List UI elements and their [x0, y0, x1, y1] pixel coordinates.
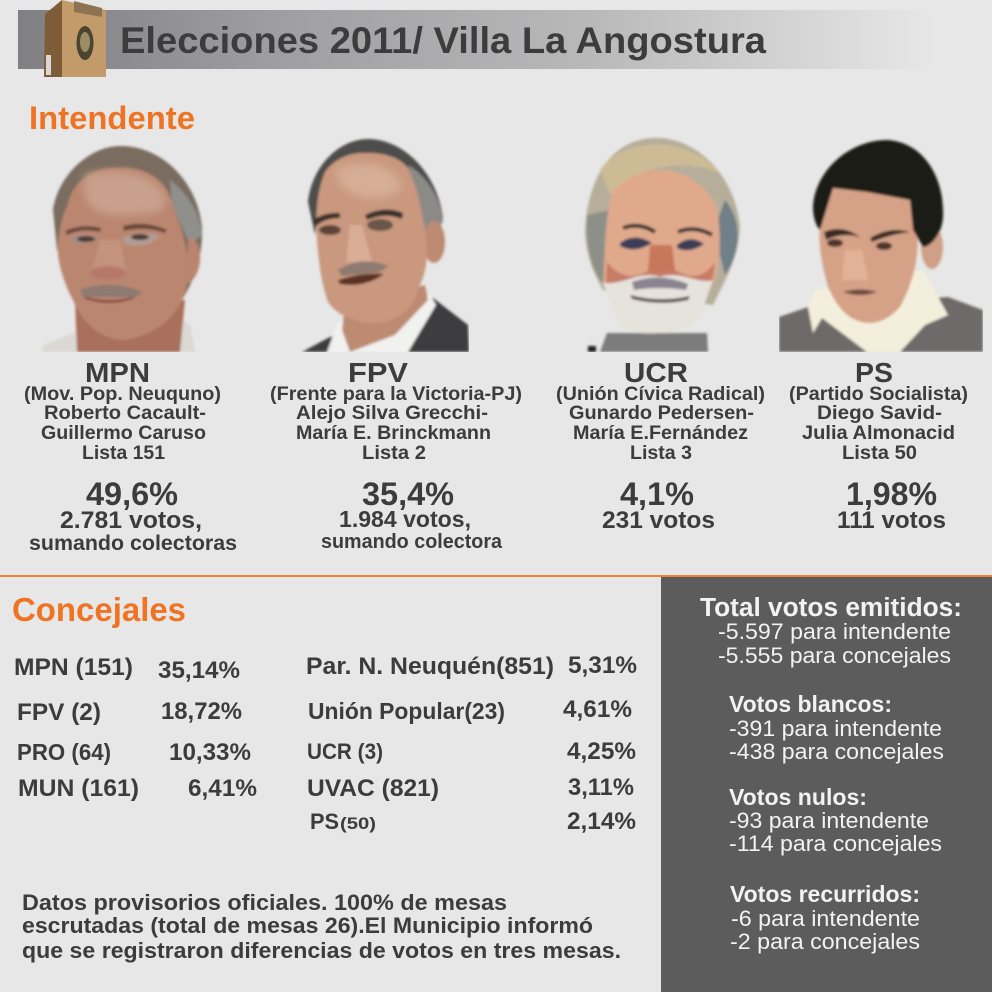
candidate column: FPV: María E. Brinckmann — [296, 422, 491, 444]
candidate column: UCR: Gunardo Pedersen- — [569, 402, 754, 424]
null votes: -93 para intendente — [729, 808, 929, 833]
total votes: Total votos emitidos: — [700, 594, 962, 622]
candidate column: MPN: 49,6% — [86, 476, 178, 512]
council results: left column: 18,72% — [161, 698, 242, 725]
candidate column: MPN: Roberto Cacault- — [44, 402, 206, 424]
council results: left column: FPV (2) — [17, 699, 101, 726]
candidate column: PS: 1,98% — [846, 476, 937, 512]
candidate column: FPV: 1.984 votos, — [339, 506, 471, 532]
blank votes: Votos blancos: — [729, 691, 892, 717]
council results: right column: UCR (3) — [307, 739, 383, 764]
footnote: escrutadas (total de mesas 26).El Municipio informó — [22, 913, 593, 938]
portrait: MPN candidate — [41, 146, 202, 352]
portrait: PS candidate — [779, 140, 983, 352]
header gradient bar — [18, 10, 933, 69]
council results: right column: 5,31% — [568, 652, 637, 679]
footnote — [22, 890, 621, 963]
portrait: UCR candidate — [585, 138, 740, 352]
candidate column: MPN: sumando colectoras — [29, 532, 237, 555]
null votes — [729, 784, 942, 856]
candidate column: MPN: 2.781 votos, — [60, 507, 202, 534]
candidate column: FPV — [270, 357, 522, 553]
candidate column: FPV: (Frente para la Victoria-PJ) — [270, 383, 522, 405]
total votes: -5.597 para intendente — [718, 619, 951, 644]
council results: right column: 3,11% — [568, 774, 634, 801]
candidate column: MPN: Lista 151 — [82, 442, 165, 464]
heading: Intendente: Intendente — [29, 100, 195, 136]
candidate column: MPN: MPN — [85, 357, 150, 388]
council results: left column: 6,41% — [188, 775, 257, 802]
council results: right column: Unión Popular(23) — [308, 698, 505, 724]
council results: right column: 4,25% — [567, 738, 636, 765]
contested votes: -6 para intendente — [731, 906, 920, 931]
candidate column: FPV: sumando colectora — [321, 531, 503, 553]
candidate column: PS: Julia Almonacid — [802, 422, 955, 444]
candidate column: MPN: Guillermo Caruso — [41, 422, 206, 444]
candidate column: PS: Diego Savid- — [817, 402, 942, 424]
council results: left column: MPN (151) — [14, 654, 133, 681]
contested votes: Votos recurridos: — [730, 881, 920, 907]
council results: right column: (50) — [340, 814, 376, 833]
candidate column: UCR: (Unión Cívica Radical) — [556, 383, 765, 405]
contested votes — [730, 881, 920, 954]
candidate column: UCR — [556, 357, 765, 534]
candidate column: FPV: Alejo Silva Grecchi- — [296, 402, 488, 424]
candidate column: UCR: Lista 3 — [630, 442, 692, 464]
total votes — [700, 594, 962, 668]
council results: left column — [14, 654, 257, 802]
candidate column: MPN: (Mov. Pop. Neuquno) — [24, 383, 221, 405]
council results: right column: Par. N. Neuquén(851) — [306, 653, 554, 680]
council results: right column: PS — [310, 809, 339, 834]
candidate column: MPN — [24, 357, 237, 555]
blank votes — [729, 691, 944, 764]
footnote: Datos provisorios oficiales. 100% de mesas — [22, 890, 507, 915]
candidate column: PS: PS — [855, 357, 893, 388]
header banner — [18, 0, 933, 77]
icon: ballot box — [44, 0, 106, 77]
portrait: FPV candidate — [302, 139, 469, 352]
council results: right column: 4,61% — [563, 696, 632, 723]
candidate column: PS: (Partido Socialista) — [789, 383, 968, 405]
total votes: -5.555 para concejales — [718, 643, 951, 668]
candidate column: FPV: Lista 2 — [362, 442, 426, 464]
candidate column: FPV: 35,4% — [362, 476, 454, 512]
candidate column: FPV: FPV — [348, 357, 408, 388]
title: Elecciones 2011/ Villa La Angostura — [120, 20, 766, 61]
council results: right column — [306, 652, 637, 835]
candidate column: UCR: María E.Fernández — [573, 422, 748, 444]
null votes: Votos nulos: — [729, 784, 867, 810]
council results: left column: 10,33% — [169, 739, 251, 766]
candidate column: UCR: UCR — [624, 357, 688, 388]
council results: right column: 2,14% — [567, 808, 636, 835]
candidate column: UCR: 4,1% — [620, 476, 694, 512]
council results: right column: UVAC (821) — [307, 775, 439, 802]
blank votes: -391 para intendente — [729, 716, 942, 741]
candidate column: PS: 111 votos — [837, 507, 946, 534]
candidate column: UCR: 231 votos — [602, 507, 715, 534]
panel: vote totals — [661, 577, 992, 992]
council results: left column: MUN (161) — [18, 775, 139, 802]
candidate column: PS — [789, 357, 968, 534]
footnote: que se registraron diferencias de votos en tres mesas. — [22, 938, 621, 963]
heading: Concejales: Concejales — [12, 591, 186, 628]
blank votes: -438 para concejales — [729, 739, 944, 764]
contested votes: -2 para concejales — [730, 929, 920, 954]
council results: left column: PRO (64) — [17, 739, 111, 765]
candidate column: PS: Lista 50 — [842, 442, 917, 464]
null votes: -114 para concejales — [729, 831, 942, 856]
council results: left column: 35,14% — [158, 657, 240, 684]
